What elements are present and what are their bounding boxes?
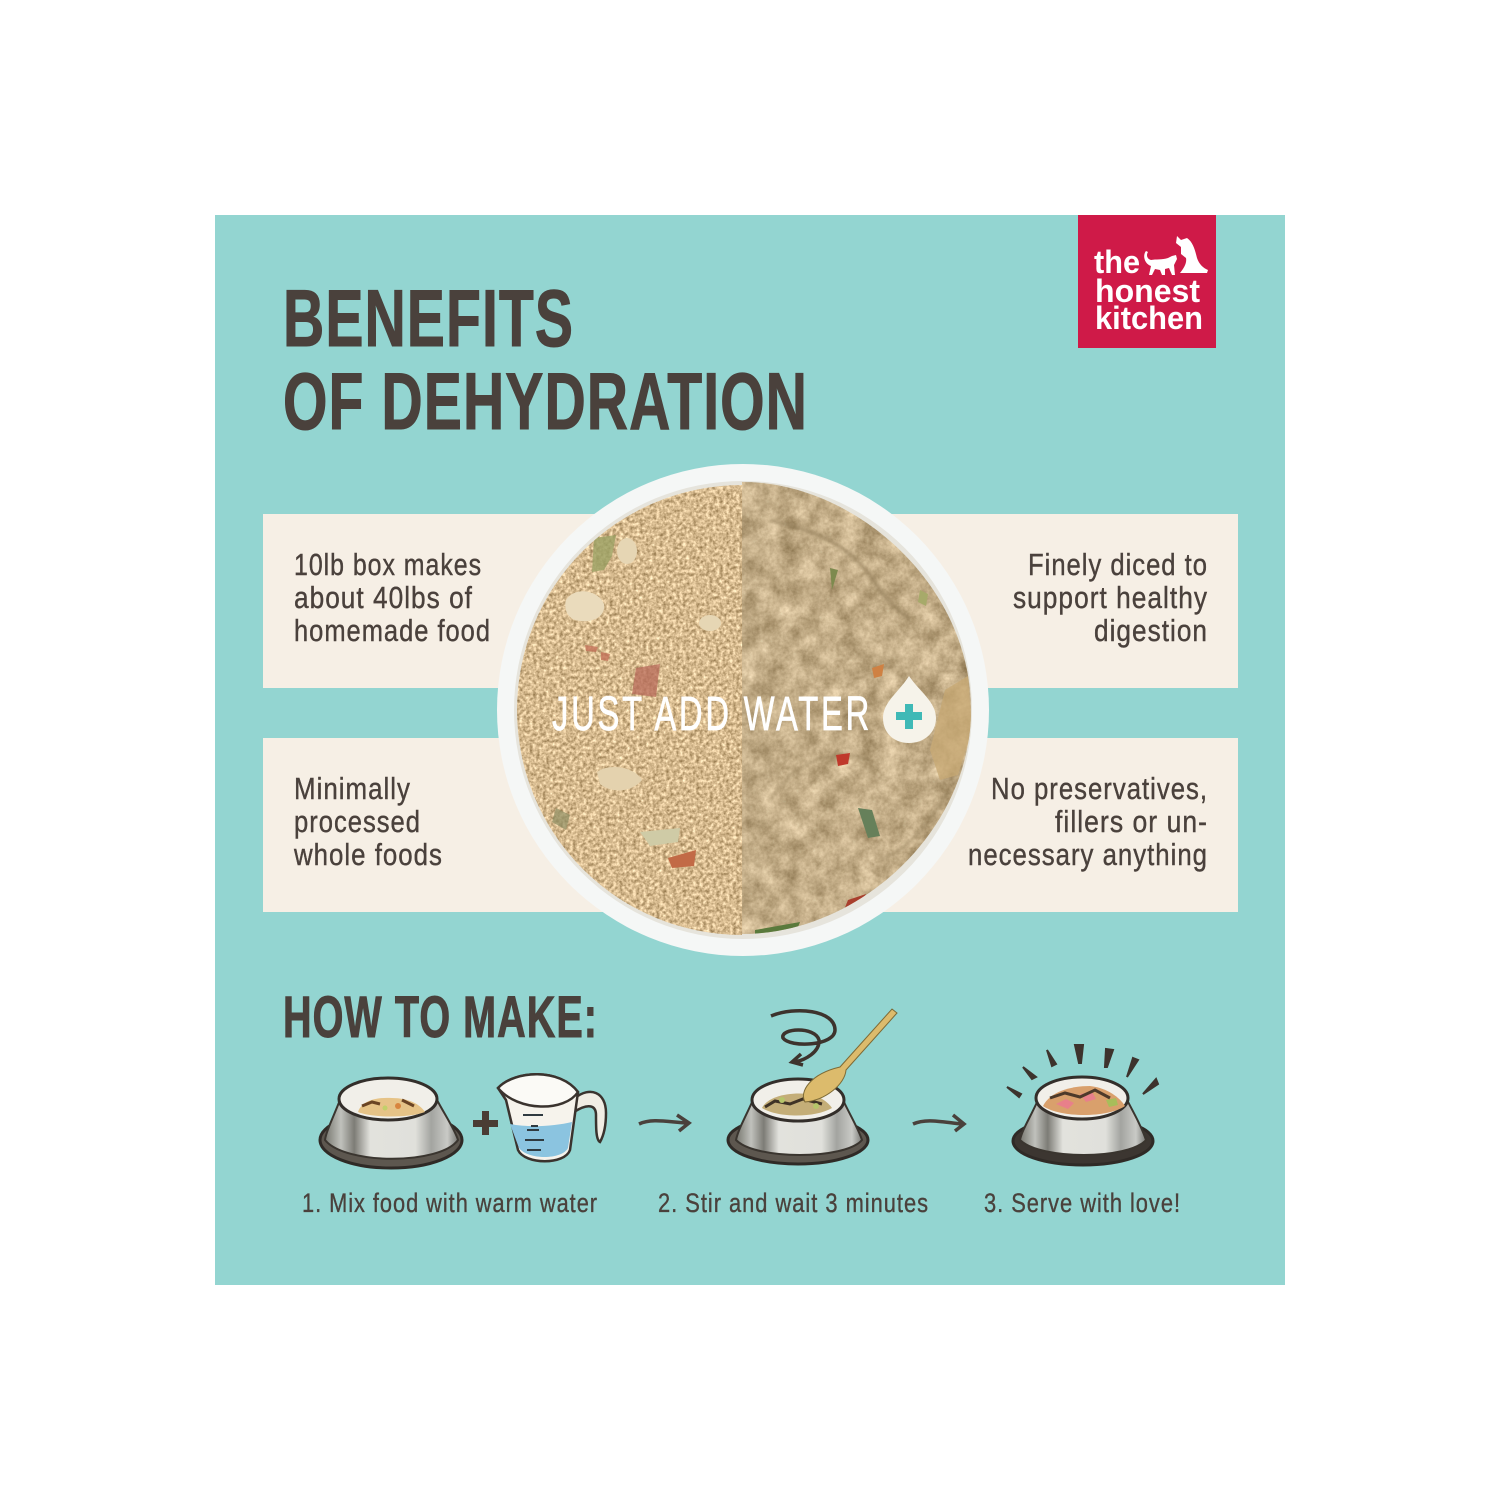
title: BENEFITS	[283, 274, 574, 364]
icon: serving bowl with shine rays	[1007, 1045, 1158, 1165]
icon: measuring jug with water	[498, 1074, 606, 1161]
just add water label: JUST ADD WATER	[552, 688, 872, 741]
icon: cat and dog silhouette	[1144, 236, 1208, 275]
panel: bottom left benefit: whole foods	[293, 837, 443, 872]
hydrated food half	[742, 480, 974, 940]
icon: bowl with food	[320, 1078, 462, 1168]
panel: top right benefit: digestion	[1094, 613, 1208, 648]
panel: bottom left benefit: processed	[294, 804, 421, 839]
step label 3: 3. Serve with love!	[984, 1188, 1181, 1218]
arrow: step two to three	[913, 1115, 964, 1131]
spoon	[803, 1009, 897, 1102]
panel: top left benefit: about 40lbs of	[294, 580, 473, 615]
stir swirl arrow	[771, 1011, 835, 1065]
step label 2: 2. Stir and wait 3 minutes	[658, 1188, 929, 1218]
title	[283, 274, 808, 447]
panel: top left benefit	[263, 514, 623, 688]
step label 1: 1. Mix food with warm water	[302, 1188, 598, 1218]
icon: plus sign	[473, 1111, 498, 1135]
panel: bottom left benefit: Minimally	[294, 771, 411, 806]
dry food half	[510, 480, 742, 940]
panel: bottom left benefit	[263, 738, 623, 912]
panel: bottom right benefit: fillers or un-	[1055, 804, 1208, 839]
icon: water drop with plus	[883, 676, 936, 743]
panel: top left benefit: homemade food	[294, 613, 491, 648]
heading: how to make: HOW TO MAKE:	[283, 985, 598, 1050]
title: OF DEHYDRATION	[283, 357, 808, 447]
logo word: honest: honest	[1095, 273, 1200, 309]
teal background panel	[215, 215, 1285, 1285]
logo word: kitchen: kitchen	[1095, 300, 1203, 336]
panel: bottom right benefit	[870, 738, 1238, 912]
arrow: step one to two	[639, 1115, 689, 1131]
logo word: the: the	[1094, 244, 1140, 280]
panel: top right benefit: Finely diced to	[1028, 547, 1208, 582]
icon: bowl with spoon and stir swirl	[728, 1009, 897, 1164]
panel: top right benefit: support healthy	[1013, 580, 1208, 615]
panel: bottom right benefit: necessary anything	[968, 837, 1208, 872]
panel: top left benefit: 10lb box makes	[294, 547, 482, 582]
panel: top right benefit	[870, 514, 1238, 688]
logo: the honest kitchen	[1078, 215, 1216, 348]
panel: bottom right benefit: No preservatives,	[991, 771, 1208, 806]
food bowl: dry and hydrated halves	[497, 464, 989, 956]
shine rays	[1007, 1045, 1158, 1097]
